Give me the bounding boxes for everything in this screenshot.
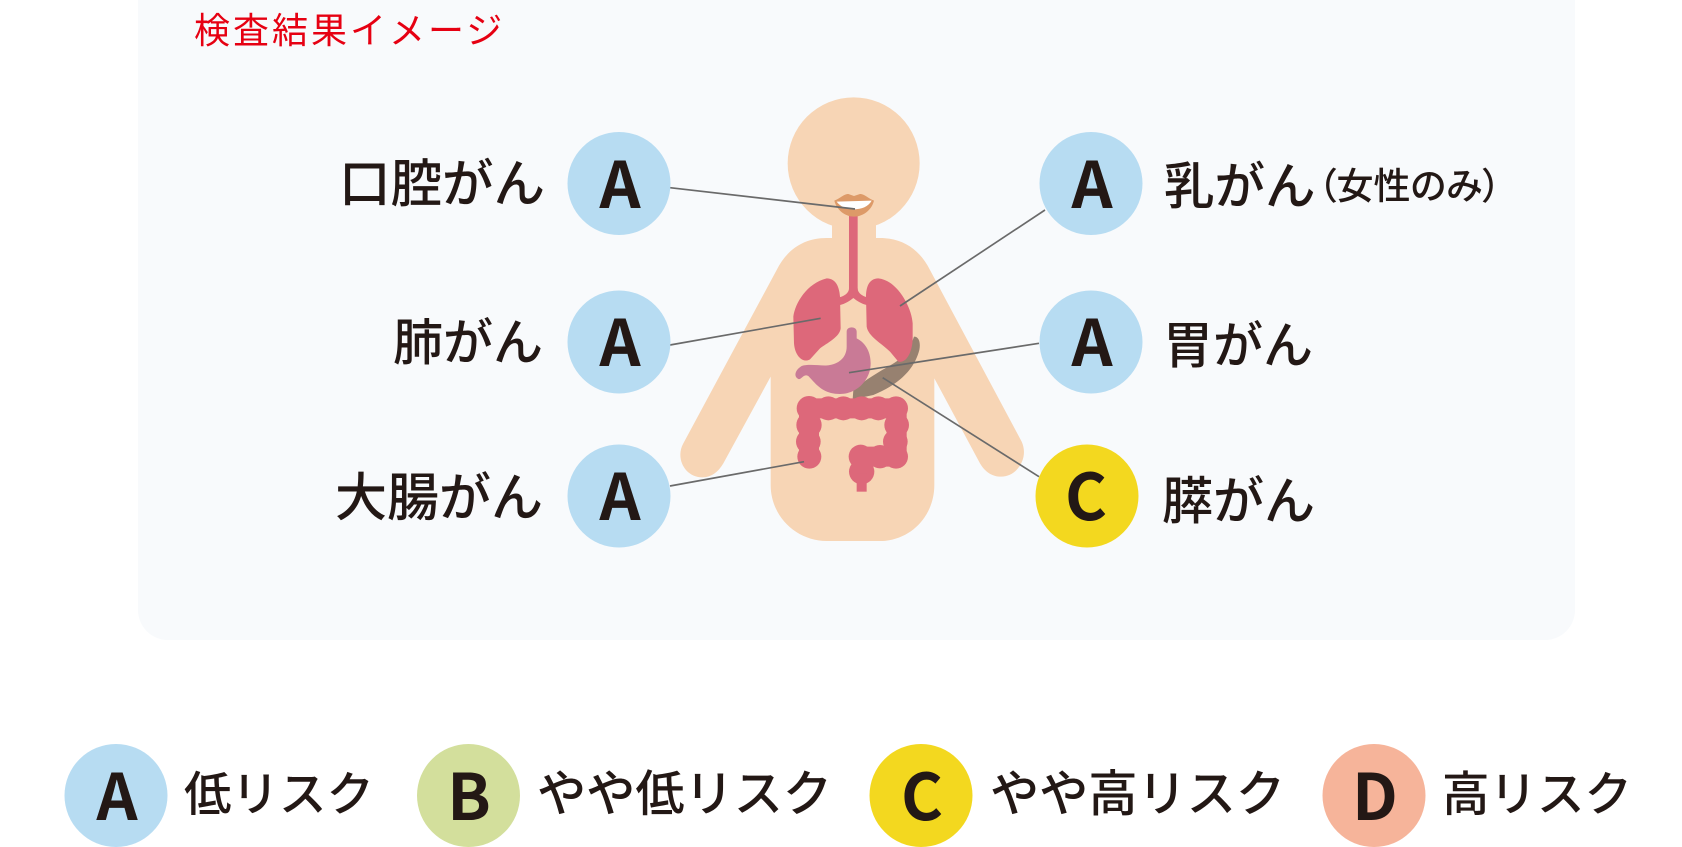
legend: slightly low risk: B	[447, 747, 491, 839]
item: breast cancer: 乳がん	[1164, 145, 1316, 219]
leader lines	[670, 188, 1045, 486]
illustration: human body with organs	[670, 97, 1045, 541]
stomach	[795, 327, 871, 394]
item: colon cancer: A	[598, 447, 641, 539]
item: colon cancer	[335, 444, 670, 548]
item: breast cancer: A	[1070, 135, 1113, 227]
item: oral cancer: A	[598, 135, 641, 227]
item: lung cancer: 肺がん	[393, 303, 543, 375]
item: colon cancer: 大腸がん	[335, 456, 543, 531]
legend	[64, 744, 1632, 847]
large intestine	[796, 396, 909, 492]
legend: high risk: D	[1352, 747, 1398, 839]
body silhouette	[680, 97, 1024, 541]
legend: high risk	[1322, 744, 1632, 847]
item: breast cancer	[1040, 132, 1501, 235]
legend: slightly low risk: やや低リスク	[537, 755, 832, 826]
item: pancreatic cancer: 膵がん	[1162, 460, 1315, 534]
legend: slightly high risk: やや高リスク	[990, 755, 1285, 826]
legend: high risk: 高リスク	[1442, 756, 1632, 825]
item: pancreatic cancer: C	[1065, 447, 1107, 539]
legend: low risk: A	[95, 747, 138, 839]
pancreas	[853, 337, 920, 399]
item: lung cancer	[393, 290, 670, 394]
legend: slightly low risk	[417, 744, 832, 847]
item: stomach cancer: A	[1070, 293, 1113, 385]
item: oral cancer: 口腔がん	[339, 142, 545, 217]
mouth	[834, 194, 874, 217]
item: oral cancer	[339, 132, 670, 235]
legend: slightly high risk	[870, 744, 1285, 847]
legend: low risk: 低リスク	[184, 756, 374, 825]
item: pancreatic cancer	[1036, 444, 1315, 548]
trachea and lungs	[793, 213, 913, 362]
panel: test result image	[138, 0, 1575, 640]
title: 検査結果イメージ	[194, 2, 505, 54]
legend: low risk	[64, 744, 374, 847]
item: stomach cancer: 胃がん	[1163, 306, 1313, 378]
item: lung cancer: A	[598, 293, 641, 385]
item: breast cancer: （女性のみ）	[1318, 156, 1501, 210]
legend: slightly high risk: C	[901, 747, 943, 839]
item: stomach cancer	[1040, 290, 1313, 394]
